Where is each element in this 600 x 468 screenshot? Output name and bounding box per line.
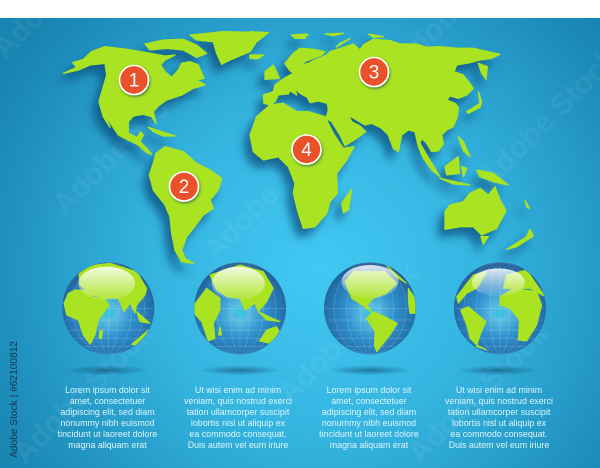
- caption 4: Duis autem vel eum iriure: [449, 440, 549, 450]
- caption 2: lobortis nisl ut aliquip ex: [191, 418, 286, 428]
- caption 3: Lorem ipsum dolor sit: [327, 385, 412, 395]
- caption 1: adipiscing elit, sed diam: [60, 407, 155, 417]
- caption 4: ea commodo consequat.: [450, 429, 548, 439]
- watermarks: Adobe Stock: [7, 317, 160, 468]
- caption 2: tation ullamcorper suscipit: [187, 407, 290, 417]
- globe 3: Americas: [323, 262, 417, 375]
- caption 2: ea commodo consequat.: [189, 429, 287, 439]
- caption 1: tincidunt ut laoreet dolore: [58, 429, 157, 439]
- caption 1: Lorem ipsum dolor sit: [65, 385, 150, 395]
- watermarks: Adobe Stock: [402, 317, 555, 468]
- caption 1: nonummy nibh euismod: [60, 418, 155, 428]
- caption 4: Ut wisi enim ad minim: [456, 385, 542, 395]
- caption 3: tincidunt ut laoreet dolore: [319, 429, 419, 439]
- caption 4: veniam, quis nostrud exerci: [445, 396, 553, 406]
- caption 2: Ut wisi enim ad minim: [195, 385, 281, 395]
- caption 1: amet, consectetuer: [70, 396, 145, 406]
- marker 1: [120, 66, 148, 94]
- watermarks: Adobe Stock: [272, 257, 425, 410]
- caption 3: nonummy nibh euismod: [322, 418, 416, 428]
- globe 2: Indian Ocean east: [193, 262, 287, 375]
- marker 2: [170, 172, 198, 201]
- caption 1: [58, 385, 157, 450]
- world map: [63, 32, 533, 263]
- globe 4: Atlantic: [453, 262, 547, 375]
- stock id vertical text: Adobe Stock | #62100812: [9, 341, 20, 458]
- marker 4: 4: [301, 140, 312, 161]
- caption 2: Duis autem vel eum iriure: [188, 440, 288, 450]
- marker 3: [360, 58, 388, 86]
- caption 3: magna aliquam erat: [330, 440, 409, 450]
- caption 4: [445, 385, 553, 450]
- map: Americas: [63, 32, 307, 263]
- caption 3: [319, 385, 419, 450]
- watermarks: Adobe Stock: [197, 114, 350, 267]
- caption 3: amet, consectetuer: [331, 396, 407, 406]
- marker 2: 2: [179, 177, 189, 198]
- caption 4: tation ullamcorper suscipit: [448, 407, 551, 417]
- marker 3: 3: [369, 62, 379, 84]
- caption 2: [184, 385, 292, 450]
- watermarks: Adobe Stock: [47, 68, 200, 221]
- marker 4: [292, 135, 321, 164]
- caption 1: magna aliquam erat: [68, 440, 147, 450]
- map: Eurasia Africa Oceania: [250, 32, 533, 249]
- caption 2: veniam, quis nostrud exerci: [184, 396, 292, 406]
- caption 4: lobortis nisl ut aliquip ex: [452, 418, 547, 428]
- caption 3: adipiscing elit, sed diam: [322, 407, 416, 417]
- marker 1: 1: [129, 70, 139, 92]
- globe 1: Indian Ocean: [62, 262, 155, 375]
